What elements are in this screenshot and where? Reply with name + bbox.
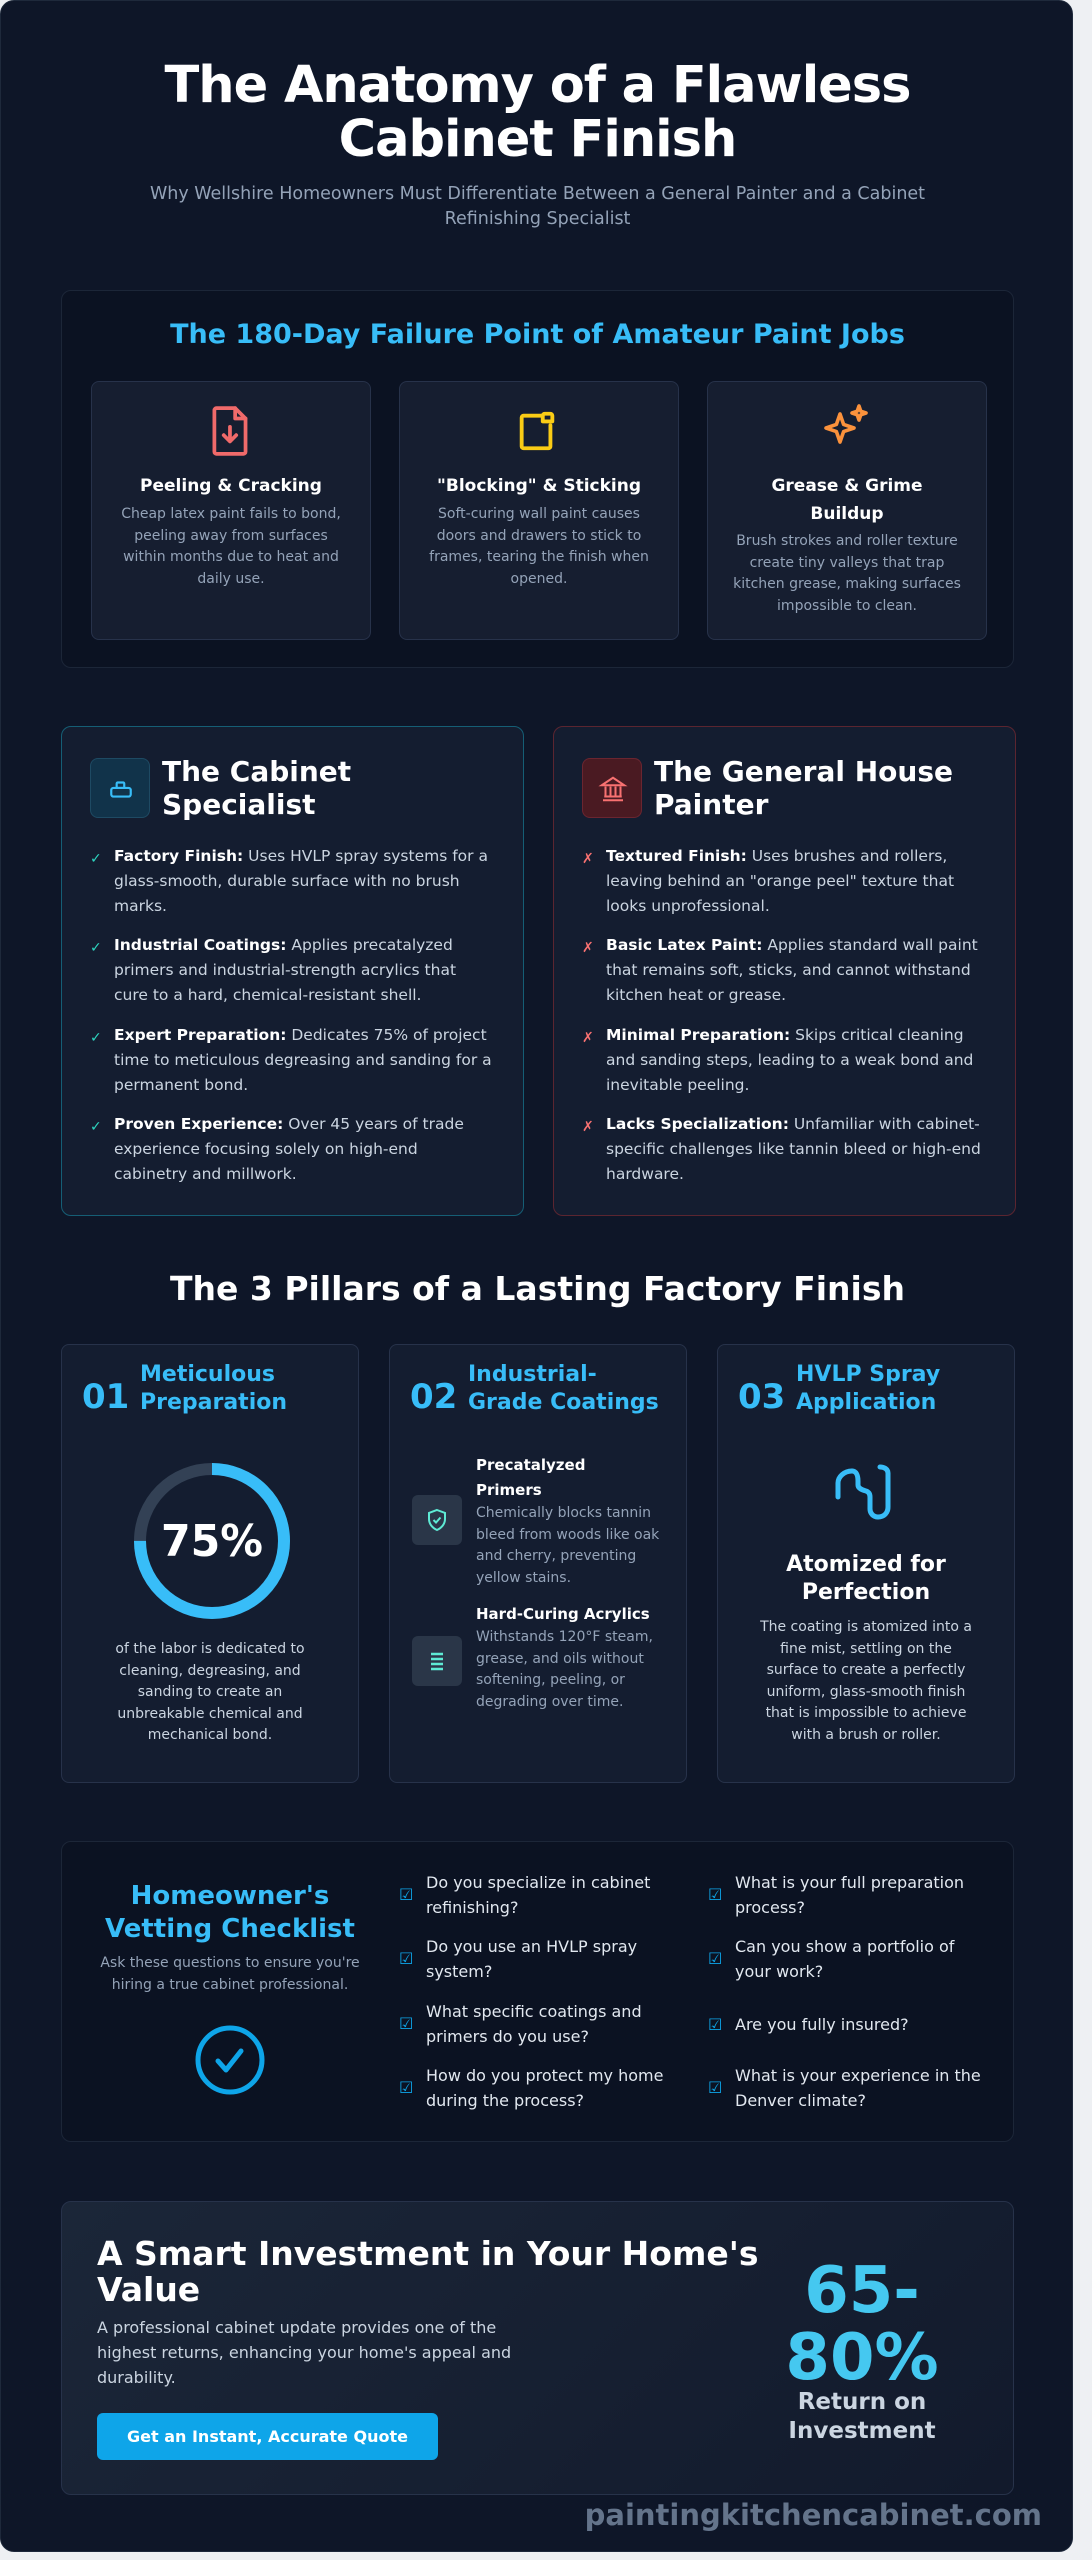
title: The Anatomy of a Flawless bbox=[164, 56, 910, 115]
panel: general painter bbox=[553, 726, 1016, 1216]
panel: checklist: What specific coatings and primers do you use? bbox=[426, 2002, 642, 2046]
panel: checklist bbox=[61, 1841, 1014, 2142]
panel: checklist: How do you protect my home during the process? bbox=[426, 2066, 663, 2110]
heading: checklist: Homeowner's Vetting Checklist bbox=[105, 1881, 355, 1944]
panel: cabinet specialist: Proven Experience: Over 45 years of trade experience focusing solely on high-end cabinetry and millwork. bbox=[114, 1115, 464, 1183]
panel: checklist: What is your full preparation process? bbox=[735, 1873, 964, 1917]
item: acrylics: Withstands 120°F steam, grease, and oils without softening, peeling, or degrading over time. bbox=[476, 1629, 653, 1710]
stat: ROI: Return on bbox=[798, 2389, 926, 2415]
icon: lines bbox=[412, 1636, 462, 1686]
panel: checklist: ☑ bbox=[399, 2078, 413, 2097]
icon: sticky note bbox=[520, 412, 554, 450]
icon: check circle bbox=[196, 2026, 264, 2094]
panel: checklist: Do you specialize in cabinet refinishing? bbox=[426, 1873, 650, 1917]
pillar 3: HVLP Spray bbox=[796, 1362, 940, 1387]
list: painter points bbox=[582, 847, 981, 1183]
icon: spray bbox=[836, 1464, 890, 1520]
card: blocking bbox=[399, 381, 679, 640]
stat: ROI: 80% bbox=[785, 2321, 939, 2395]
chart: 75% ring: 75% bbox=[161, 1516, 263, 1567]
panel: general painter: ✗ bbox=[582, 1119, 594, 1135]
panel: checklist: ☑ bbox=[708, 2078, 722, 2097]
panel: failure points bbox=[61, 290, 1014, 668]
panel: checklist: ☑ bbox=[399, 1885, 413, 1904]
heading: general painter bbox=[654, 755, 953, 821]
text: prep description: of the labor is dedicated to cleaning, degreasing, and sanding to create an unbreakable chemical and mechanical bond. bbox=[115, 1641, 305, 1743]
pillar 1 bbox=[61, 1344, 359, 1783]
icon: specialist bbox=[90, 758, 150, 818]
icon: painter bbox=[582, 758, 642, 818]
panel: cabinet specialist: ✓ bbox=[90, 1030, 102, 1046]
icon: shield bbox=[412, 1495, 462, 1545]
item: primers bbox=[412, 1456, 660, 1586]
card: grease bbox=[707, 381, 987, 640]
panel: checklist: ☑ bbox=[708, 1949, 722, 1968]
panel: checklist: ☑ bbox=[708, 1885, 722, 1904]
card: grease: Brush strokes and roller texture create tiny valleys that trap kitchen grease, making surfaces impossible to clean. bbox=[733, 533, 961, 614]
stat: ROI: 65- bbox=[804, 2254, 920, 2328]
button: quote bbox=[97, 2413, 438, 2460]
card: grease: Grease & Grime Buildup bbox=[771, 476, 923, 524]
panel: cabinet specialist: ✓ bbox=[90, 940, 102, 956]
panel: general painter: ✗ bbox=[582, 1030, 594, 1046]
heading: cabinet specialist bbox=[162, 755, 351, 821]
pillar 1: Meticulous bbox=[140, 1362, 275, 1387]
panel: checklist: ☑ bbox=[399, 2014, 413, 2033]
card: peeling: Cheap latex paint fails to bond, peeling away from surfaces within months due to heat and daily use. bbox=[121, 506, 341, 586]
heading: investment: A Smart Investment in Your Home's Value bbox=[97, 2234, 758, 2309]
stat: ROI bbox=[785, 2254, 939, 2444]
pillar 3: Application bbox=[796, 1390, 936, 1415]
panel: checklist: Can you show a portfolio of your work? bbox=[735, 1937, 954, 1981]
panel: cabinet specialist bbox=[61, 726, 524, 1216]
panel: checklist: Ask these questions to ensure you're hiring a true cabinet professional. bbox=[100, 1955, 360, 1993]
text: spray description: The coating is atomized into a fine mist, settling on the surface to create a perfectly uniform, glass-smooth finish that is impossible to achieve with a brush or roller. bbox=[760, 1619, 972, 1742]
panel: checklist: What is your experience in the Denver climate? bbox=[735, 2066, 981, 2110]
heading: cabinet specialist: The Cabinet bbox=[162, 755, 351, 788]
panel: general painter: Minimal Preparation: Skips critical cleaning and sanding steps, leading to a weak bond and inevitable peeling. bbox=[606, 1026, 973, 1094]
footer: website: paintingkitchencabinet.com bbox=[585, 2498, 1042, 2532]
heading: failure: The 180-Day Failure Point of Amateur Paint Jobs bbox=[170, 319, 905, 350]
panel: checklist: ☑ bbox=[708, 2015, 722, 2034]
panel: checklist: Do you use an HVLP spray system? bbox=[426, 1937, 637, 1981]
icon: file down bbox=[212, 406, 248, 456]
item: primers: Chemically blocks tannin bleed from woods like oak and cherry, preventing yellow stains. bbox=[476, 1505, 659, 1586]
heading: cabinet specialist: Specialist bbox=[162, 788, 316, 821]
list: specialist points bbox=[90, 847, 492, 1183]
panel: cabinet specialist: Expert Preparation: Dedicates 75% of project time to meticulous degreasing and sanding for a permanent bond. bbox=[114, 1026, 492, 1094]
panel: general painter: Textured Finish: Uses brushes and rollers, leaving behind an "orange peel" texture that looks unprofessional. bbox=[606, 847, 954, 915]
item: acrylics bbox=[412, 1605, 653, 1710]
panel: investment bbox=[61, 2201, 1014, 2495]
subtitle: Why Wellshire Homeowners Must Differentiate Between a General Painter and a Cabinet Refinishing Specialist bbox=[150, 184, 925, 229]
item: acrylics: Hard-Curing Acrylics bbox=[476, 1605, 650, 1623]
button: quote: Get an Instant, Accurate Quote bbox=[127, 2427, 408, 2446]
pillar 1: Preparation bbox=[140, 1390, 287, 1415]
pillar 2 bbox=[389, 1344, 687, 1783]
pillar 3: 03 bbox=[738, 1377, 785, 1417]
heading: pillars: The 3 Pillars of a Lasting Factory Finish bbox=[170, 1269, 905, 1308]
panel: cabinet specialist: ✓ bbox=[90, 851, 102, 867]
card: blocking: Soft-curing wall paint causes doors and drawers to stick to frames, tearing the finish when opened. bbox=[429, 506, 649, 586]
pillar 3: Atomized for Perfection bbox=[786, 1552, 946, 1605]
chart: 75% ring bbox=[134, 1463, 290, 1619]
panel: checklist: ☑ bbox=[399, 1949, 413, 1968]
panel: general painter: Lacks Specialization: Unfamiliar with cabinet-specific challenges like tannin bleed or high-end hardware. bbox=[606, 1115, 981, 1183]
pillar 2: 02 bbox=[410, 1377, 457, 1417]
pillar 1: 01 bbox=[82, 1377, 129, 1417]
pillar 2: Industrial- bbox=[468, 1362, 597, 1387]
panel: cabinet specialist: Industrial Coatings: Applies precatalyzed primers and industrial-strength acrylics that cure to a hard, chemical-resistant shell. bbox=[114, 936, 456, 1004]
panel: general painter: ✗ bbox=[582, 851, 594, 867]
card: blocking: "Blocking" & Sticking bbox=[437, 476, 641, 496]
panel: general painter: Basic Latex Paint: Applies standard wall paint that remains soft, sticks, and cannot withstand kitchen heat or grease. bbox=[606, 936, 978, 1004]
panel: cabinet specialist: ✓ bbox=[90, 1119, 102, 1135]
panel: investment: A professional cabinet update provides one of the highest returns, enhancing your home's appeal and durability. bbox=[97, 2318, 511, 2387]
title: Cabinet Finish bbox=[339, 110, 736, 169]
pillar 3 bbox=[717, 1344, 1015, 1783]
card: peeling: Peeling & Cracking bbox=[140, 476, 322, 496]
list: questions bbox=[399, 1873, 981, 2110]
heading: general painter: The General House bbox=[654, 755, 953, 788]
stat: ROI: Investment bbox=[788, 2418, 936, 2444]
title bbox=[164, 56, 910, 169]
card: peeling bbox=[91, 381, 371, 640]
pillar 2: Grade Coatings bbox=[468, 1390, 659, 1415]
item: primers: Precatalyzed Primers bbox=[476, 1456, 585, 1499]
icon: sparkles bbox=[824, 404, 868, 444]
heading: general painter: Painter bbox=[654, 788, 768, 821]
panel: cabinet specialist: Factory Finish: Uses HVLP spray systems for a glass-smooth, durable surface with no brush marks. bbox=[114, 847, 488, 915]
panel: checklist: Are you fully insured? bbox=[735, 2015, 909, 2034]
panel: general painter: ✗ bbox=[582, 940, 594, 956]
